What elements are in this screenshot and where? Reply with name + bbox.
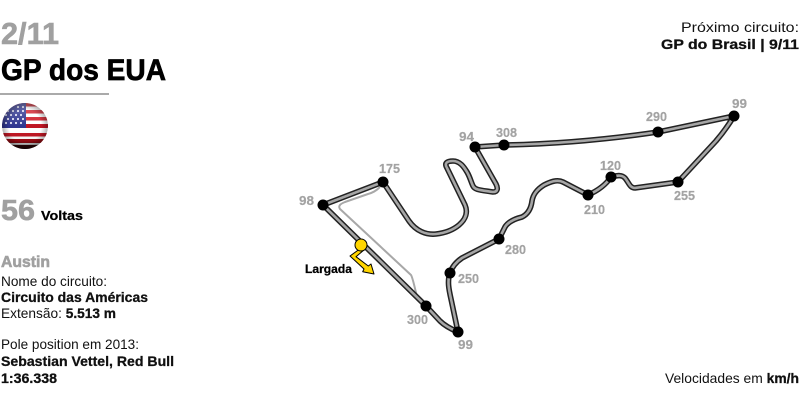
arrow: start direction	[350, 250, 374, 274]
circuit centre line	[323, 116, 734, 332]
circuit outline	[323, 116, 734, 332]
speed labels: 250	[458, 271, 479, 286]
speed labels: 99	[732, 96, 747, 111]
start label: Largada	[305, 264, 353, 276]
title: GP dos EUA	[1, 54, 166, 87]
speed labels: 300	[407, 312, 428, 327]
speed labels: 98	[299, 193, 314, 208]
pole position label: Pole position em 2013:	[1, 336, 139, 352]
pit lane	[339, 187, 418, 300]
speed labels: 94	[459, 129, 475, 144]
start marker	[350, 239, 374, 274]
speed labels: 255	[674, 188, 695, 203]
speed labels: 99	[458, 337, 473, 352]
speed labels: 308	[496, 125, 517, 140]
next circuit name: GP do Brasil | 9/11	[661, 36, 799, 52]
speed labels: 210	[584, 202, 605, 217]
speed labels: 120	[600, 158, 621, 173]
stat: laps number: 56	[1, 195, 35, 227]
heading: race number: 2/11	[1, 16, 59, 51]
track map	[299, 96, 747, 352]
speed labels: 290	[646, 109, 667, 124]
start dot	[355, 239, 367, 251]
next circuit label: Próximo circuito:	[681, 19, 799, 35]
city name: Austin	[1, 254, 50, 271]
circuit name: Circuito das Américas	[1, 289, 148, 305]
pole position driver: Sebastian Vettel, Red Bull	[1, 353, 174, 369]
speed labels: 280	[505, 242, 526, 257]
speed checkpoints	[318, 110, 740, 338]
circuit length: Extensão: 5.513 m	[1, 305, 116, 321]
speed labels: 175	[379, 161, 400, 176]
circuit name label: Nome do circuito:	[1, 273, 107, 289]
title rule	[0, 93, 109, 95]
speed unit note: Velocidades em km/h	[665, 370, 799, 386]
pole position time: 1:36.338	[1, 370, 57, 386]
speed labels	[299, 96, 747, 352]
icon: USA flag sphere	[2, 103, 48, 150]
stat: laps label: Voltas	[41, 208, 83, 223]
